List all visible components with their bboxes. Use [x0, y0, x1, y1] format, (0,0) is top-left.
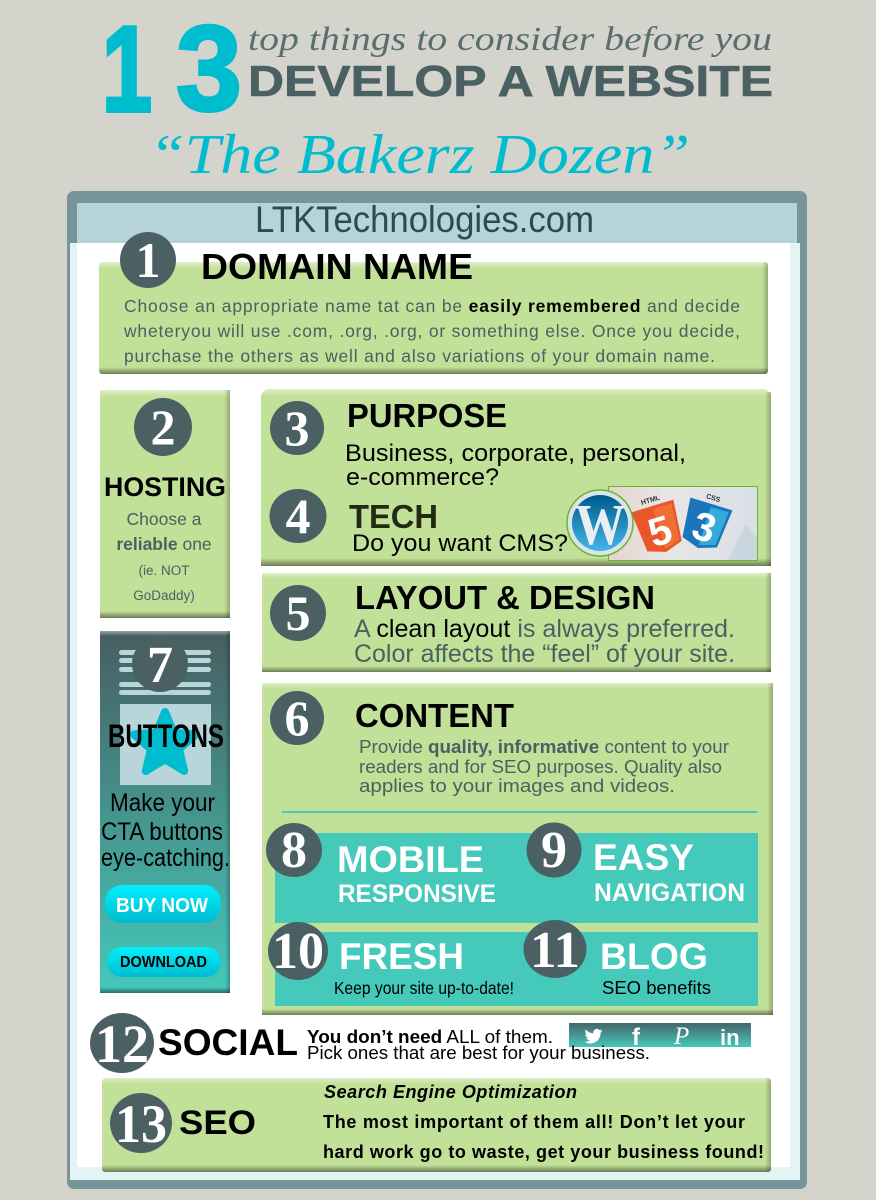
icon: css3: 3: [687, 504, 721, 552]
item 11 blog: 11: [530, 922, 580, 979]
body text: (ie. NOT: [138, 563, 190, 578]
image: technology logos: [567, 486, 758, 560]
body text: [359, 737, 729, 796]
icon: css3: [677, 489, 735, 555]
heading: SOCIAL: [158, 1022, 298, 1063]
body text: Pick ones that are best for your business.: [307, 1043, 650, 1063]
number 13: 13: [115, 1094, 167, 1154]
body text: CTA buttons: [101, 818, 223, 846]
teal band: items 10 and 11: [275, 932, 758, 1006]
body text: [323, 1082, 764, 1162]
heading: DOMAIN NAME: [201, 246, 473, 287]
number 4: [270, 488, 326, 544]
panel: 7 buttons: [100, 631, 230, 993]
icon: menu lines: [119, 650, 211, 695]
tech text: Do you want CMS?: [352, 530, 568, 557]
item 10 fresh: FRESH: [339, 936, 464, 977]
heading: LAYOUT & DESIGN: [355, 579, 655, 616]
social icons bar: [569, 1023, 751, 1051]
item 9 easy navigation: NAVIGATION: [594, 879, 745, 907]
button: download: DOWNLOAD: [120, 954, 207, 971]
body text: [123, 296, 740, 366]
body text: reliable one: [116, 534, 212, 554]
icon: html5: 5: [643, 508, 677, 556]
icon: html5: HTML: [640, 494, 662, 507]
heading: CONTENT: [355, 697, 514, 734]
panel: outer frame: [67, 191, 807, 1189]
item 8 mobile responsive: MOBILE: [337, 839, 484, 880]
purpose text: Business, corporate, personal,: [345, 440, 686, 467]
item 11 blog: BLOG: [600, 936, 708, 977]
body text: Color affects the “feel” of your site.: [354, 640, 735, 668]
body text: readers and for SEO purposes. Quality also: [359, 757, 722, 777]
big number 13: [102, 0, 242, 137]
number 4: 4: [286, 488, 310, 544]
body text: eye-catching.: [101, 844, 230, 872]
heading purpose: PURPOSE: [347, 397, 507, 434]
purpose text: [345, 440, 686, 491]
number 12: 12: [95, 1014, 149, 1074]
body text: The most important of them all! Don’t let your: [323, 1112, 745, 1132]
icon: star: [120, 704, 211, 785]
item 10 fresh: 10: [272, 923, 324, 980]
body text: [101, 789, 230, 872]
number 3: [270, 400, 324, 456]
number 6: [270, 690, 324, 746]
button: buy now: BUY NOW: [116, 895, 208, 917]
body text: A clean layout is always preferred.: [354, 615, 735, 643]
item 11 blog: SEO benefits: [602, 978, 711, 998]
body text: GoDaddy): [133, 588, 195, 603]
body text: hard work go to waste, get your business found!: [323, 1142, 764, 1162]
body text: [307, 1027, 650, 1063]
body text: applies to your images and videos.: [359, 776, 675, 796]
social icons bar: f: [632, 1024, 641, 1051]
number 1: [120, 232, 176, 288]
section: 12 social: [90, 1013, 751, 1074]
number 5: 5: [286, 585, 310, 641]
number 7: 7: [147, 637, 173, 694]
heading tech: TECH: [349, 498, 438, 535]
item 8 mobile responsive: 8: [281, 822, 307, 879]
icon: css3: CSS: [705, 493, 721, 504]
panel: 2 hosting: [100, 390, 230, 618]
body text: Provide quality, informative content to your: [359, 737, 729, 757]
icon: twitter: [584, 1029, 602, 1043]
big number 13: 1: [102, 1, 152, 137]
purpose text: e-commerce?: [346, 464, 499, 491]
number 1: 1: [136, 232, 160, 288]
panel: 6 content: [262, 683, 773, 1015]
button: buy now: [105, 885, 221, 923]
button: download: [107, 947, 221, 977]
body text: Search Engine Optimization: [324, 1082, 577, 1102]
number 5: [270, 585, 326, 641]
title: [102, 0, 773, 186]
number 7: [132, 636, 188, 694]
item 9 easy navigation: 9: [541, 822, 567, 879]
social icons bar: P: [673, 1023, 689, 1050]
site name: LTKTechnologies.com: [255, 199, 594, 240]
social icons bar: in: [720, 1025, 740, 1050]
number 2: [134, 398, 192, 456]
number 6: 6: [284, 690, 310, 746]
heading: SEO: [179, 1104, 256, 1142]
body text: [116, 509, 212, 603]
body text: [354, 615, 735, 668]
number 3: 3: [284, 400, 310, 456]
body text: Make your: [110, 789, 215, 817]
body text: purchase the others as well and also variations of your domain name.: [124, 346, 715, 366]
panel: 1 domain name: [99, 232, 768, 374]
item 10 fresh: Keep your site up-to-date!: [334, 978, 514, 998]
body text: Choose a: [127, 509, 202, 529]
icon: wordpress: W: [575, 492, 625, 557]
panel: 3 purpose and 4 tech: [261, 389, 771, 566]
body text: wheteryou will use .com, .org, .org, or something else. Once you decide,: [123, 321, 740, 341]
panel: 5 layout and design: [262, 573, 771, 672]
heading: HOSTING: [104, 472, 226, 502]
item 9 easy navigation: EASY: [593, 837, 694, 878]
body text: You don’t need ALL of them.: [307, 1027, 553, 1047]
body text: Choose an appropriate name tat can be easily remembered and decide: [124, 296, 740, 316]
subtitle line: top things to consider before you: [248, 21, 772, 58]
tagline: “The Bakerz Dozen”: [149, 124, 690, 186]
item 9 easy navigation: [526, 822, 745, 907]
item 10 fresh: [268, 922, 514, 998]
item 8 mobile responsive: [266, 822, 496, 908]
teal band: items 8 and 9: [275, 833, 758, 923]
big number 13: 3: [176, 0, 242, 136]
item 8 mobile responsive: RESPONSIVE: [338, 880, 496, 908]
headline: DEVELOP A WEBSITE: [248, 57, 773, 106]
icon: html5: [629, 491, 688, 559]
panel: 13 seo: [102, 1078, 771, 1172]
item 11 blog: [524, 920, 711, 998]
heading: BUTTONS: [108, 718, 224, 754]
number 2: 2: [150, 399, 176, 455]
